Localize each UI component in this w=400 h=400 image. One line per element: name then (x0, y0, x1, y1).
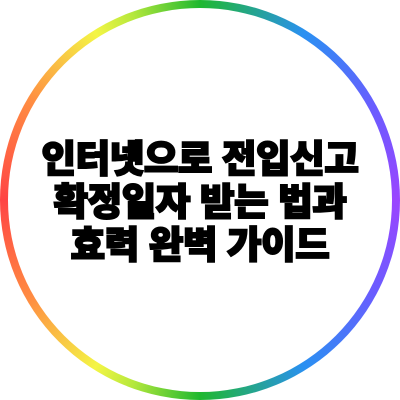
title line 2: 확정일자 받는 법과 (54, 181, 346, 223)
title line 3: 효력 완벽 가이드 (71, 224, 329, 266)
title line 1: 인터넷으로 전입신고 (42, 138, 358, 180)
